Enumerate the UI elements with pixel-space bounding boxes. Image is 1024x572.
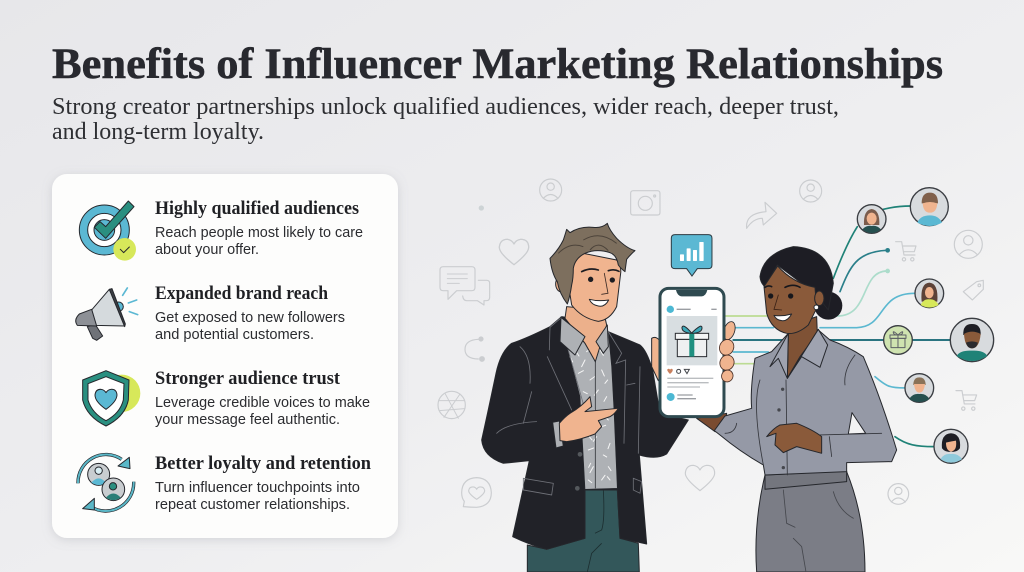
benefit: highly qualified audiences: [79, 199, 363, 261]
benefit: better loyalty and retention: Better loyalty and retention: [155, 454, 372, 474]
benefit: better loyalty and retention: repeat customer relationships.: [155, 497, 350, 513]
hair: [760, 247, 833, 310]
avatar: woman middle: [915, 279, 944, 308]
icon: chat bubbles: [440, 267, 490, 305]
icon: background heart: [499, 239, 529, 265]
belt: [765, 471, 847, 489]
trousers: [756, 472, 865, 572]
subtitle: Strong creator partnerships unlock qualified audiences, wider reach, deeper trust,: [52, 94, 839, 120]
jacket: [482, 317, 688, 549]
avatar: man lower: [905, 374, 934, 402]
hair: [550, 223, 635, 304]
avatar: man large: [950, 318, 994, 362]
face: [569, 253, 621, 321]
icon: gift: [675, 326, 709, 357]
icon: chat heart: [462, 478, 491, 507]
shirt collar: [560, 317, 608, 355]
hand behind phone: [652, 337, 662, 381]
connection lines: [725, 206, 950, 447]
icon: megaphone: [76, 288, 138, 340]
benefit: highly qualified audiences: about your offer.: [155, 242, 259, 258]
eyes and brows: [588, 277, 593, 282]
benefit: expanded brand reach: [76, 284, 345, 343]
icon: lower heart: [685, 465, 715, 491]
benefit: stronger audience trust: your message feel authentic.: [155, 412, 340, 428]
icon: analytics bubble: [671, 235, 712, 276]
fingers on phone: [717, 337, 737, 384]
icon: user outline: [540, 179, 562, 201]
title: Benefits of Influencer Marketing Relationships: [52, 41, 943, 88]
icon: aperture: [438, 391, 465, 419]
panel: benefits card: [52, 174, 398, 538]
avatar: man top: [910, 188, 948, 226]
icon: heart: [499, 239, 529, 265]
avatar: woman bottom: [934, 429, 968, 463]
icon: gift node: [884, 326, 912, 354]
hair bun: [814, 292, 842, 320]
illustration: woman: [714, 247, 897, 572]
icon: share arrow: [747, 202, 777, 228]
icon: tag: [963, 280, 983, 300]
benefit: stronger audience trust: [83, 369, 370, 428]
background icons left: [438, 179, 660, 507]
icon: cart: [896, 242, 916, 261]
avatar: woman top: [857, 205, 886, 233]
benefit: stronger audience trust: Leverage credible voices to make: [155, 395, 370, 411]
icon: retention loop: [78, 455, 134, 511]
phone post image: [667, 316, 717, 365]
top finger behind phone: [721, 320, 737, 341]
face: [764, 266, 817, 334]
icon: share: [465, 337, 484, 361]
ear and earring: [815, 291, 824, 306]
shirt cuff: [553, 421, 563, 448]
trouser seams: [587, 490, 604, 572]
benefit: expanded brand reach: Expanded brand reach: [155, 284, 329, 304]
neck: [565, 307, 607, 362]
icon: shield with heart: [83, 371, 140, 426]
subtitle: and long-term loyalty.: [52, 119, 264, 145]
neck: [787, 317, 817, 378]
trouser seams: [783, 490, 853, 572]
benefit: better loyalty and retention: [78, 454, 372, 513]
smartphone: [660, 288, 724, 417]
icon: user outline bottom: [888, 484, 909, 504]
illustration: man: [482, 223, 737, 572]
icon: cart lower: [956, 391, 977, 410]
dark hand under phone: [697, 413, 727, 432]
jacket lapels and seams: [497, 317, 642, 495]
pointing hand: [559, 397, 618, 442]
eyes and brows: [768, 293, 773, 299]
shirt: [561, 317, 617, 489]
hand: [767, 423, 822, 453]
trousers: [527, 488, 639, 572]
smile: [774, 314, 792, 321]
benefit: expanded brand reach: Get exposed to new followers: [155, 310, 345, 326]
benefit: highly qualified audiences: Highly qualified audiences: [155, 199, 359, 219]
icon: user outline top: [800, 180, 822, 202]
smile: [589, 299, 609, 306]
icon: target with check: [79, 201, 136, 261]
connection network: [725, 180, 994, 504]
background icons right: [747, 180, 983, 504]
benefit: better loyalty and retention: Turn influencer touchpoints into: [155, 480, 360, 496]
icon: camera: [631, 191, 660, 215]
benefit: stronger audience trust: Stronger audience trust: [155, 369, 341, 389]
benefit: expanded brand reach: and potential customers.: [155, 327, 314, 343]
subtitle: [52, 94, 839, 145]
ear: [556, 276, 568, 292]
blouse collar: [770, 329, 828, 378]
blouse seams: [725, 355, 882, 475]
gap between arm and torso: [848, 413, 866, 434]
blouse: [714, 330, 897, 475]
icon: user outline right: [954, 230, 982, 258]
benefit: highly qualified audiences: Reach people most likely to care: [155, 225, 363, 241]
icon: dot: [479, 205, 484, 211]
shirt pattern: [570, 342, 611, 483]
